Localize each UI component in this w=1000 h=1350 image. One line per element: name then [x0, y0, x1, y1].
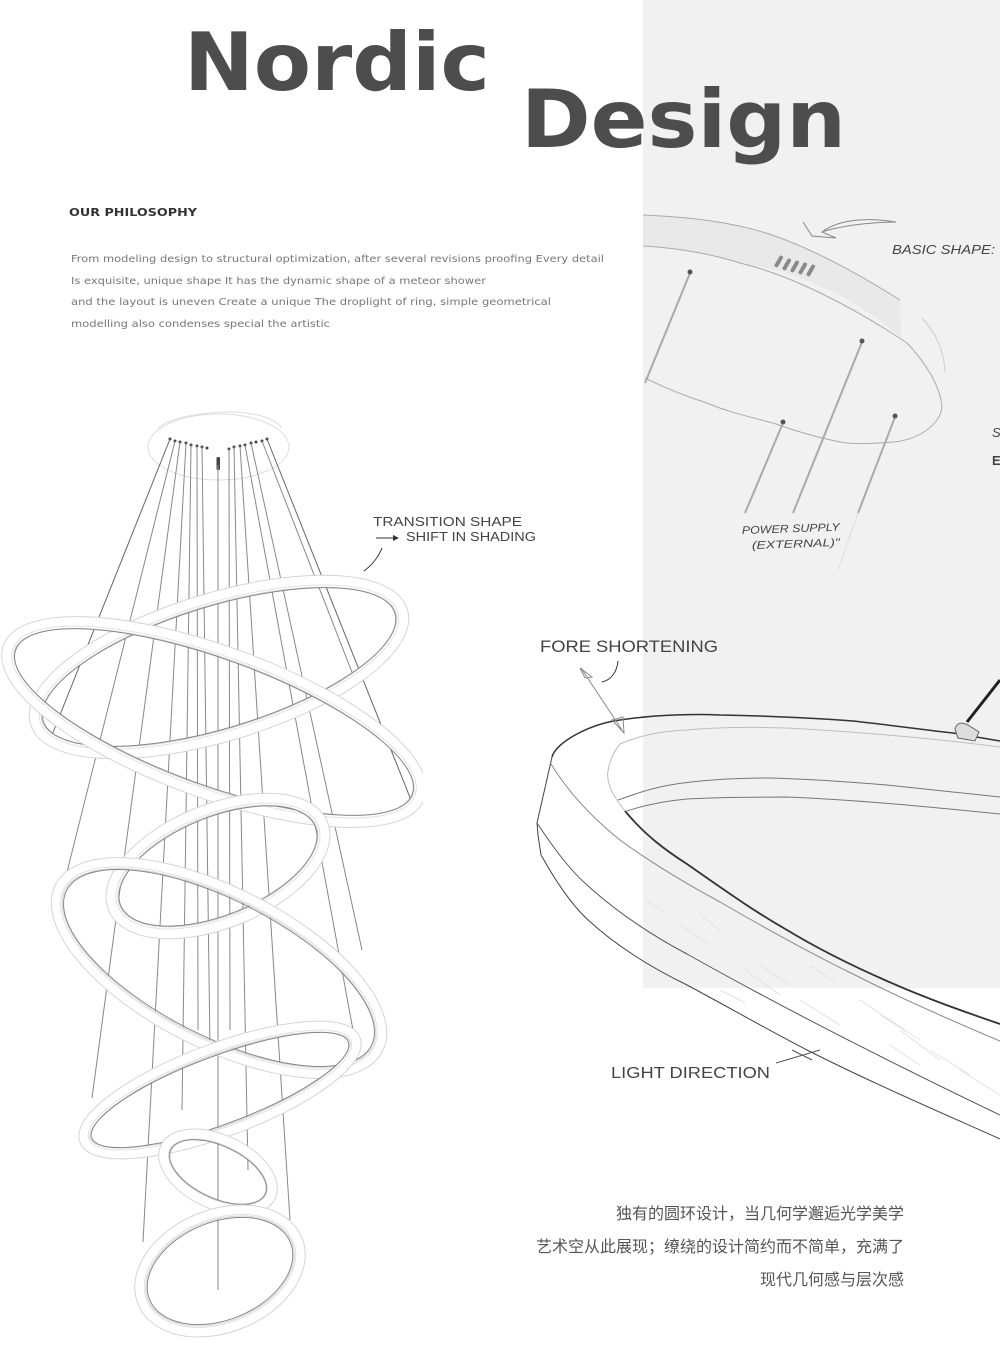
label: basic shape: BASIC SHAPE: [892, 242, 995, 257]
foreshortening arrow [580, 668, 624, 733]
text block: philosophy paragraph: and the layout is uneven Create a unique The droplight of ring, simple geometrical [71, 297, 551, 308]
ring 6 [158, 1128, 278, 1209]
ring 4 [50, 857, 388, 1079]
heading: our philosophy: OUR PHILOSOPHY [69, 206, 198, 219]
label: power supply external: POWER SUPPLY [742, 522, 841, 537]
top outer edge [552, 715, 1000, 757]
middle seam [537, 823, 1000, 1115]
label: light direction: LIGHT DIRECTION [611, 1065, 770, 1082]
text block: philosophy paragraph [71, 254, 604, 330]
illustration: large ring close-up sketch [537, 661, 1000, 1139]
ring 3 [106, 792, 330, 940]
left side edge [537, 757, 552, 855]
cable anchors [688, 270, 898, 424]
text block: chinese description: 艺术空从此展现；缭绕的设计简约而不简单，充满了 [536, 1238, 904, 1256]
text block: philosophy paragraph: modelling also condenses special the artistic [71, 319, 330, 330]
callout: transition shape: SHIFT IN SHADING [406, 529, 536, 544]
title: Design: Design [521, 73, 846, 166]
text block: philosophy paragraph: From modeling design to structural optimization, after several revisions proofing Every detail [71, 254, 604, 265]
ring 1 [28, 574, 410, 760]
label: fore shortening: FORE SHORTENING [540, 637, 718, 656]
arrow [803, 220, 896, 238]
ring 7 [134, 1204, 306, 1338]
canopy [148, 412, 289, 480]
text block: philosophy paragraph: Is exquisite, unique shape It has the dynamic shape of a meteor shower [71, 276, 486, 287]
bottom outer edge [541, 855, 1000, 1139]
callout: transition shape [364, 514, 536, 571]
hub and cable [955, 723, 979, 741]
ring 5 [78, 1020, 362, 1160]
grey lower lip [551, 764, 1000, 1041]
text block: chinese description [536, 1205, 904, 1289]
surface shading strokes [645, 900, 1000, 1095]
title: Nordic: Nordic [184, 16, 490, 109]
text block: chinese description: 现代几何感与层次感 [760, 1271, 904, 1289]
thick inner edge [625, 811, 1000, 1024]
cables [645, 273, 895, 513]
illustration: ceiling disc sketch [643, 215, 945, 570]
label: power supply external: (EXTERNAL)" [752, 537, 841, 552]
disc top band [643, 215, 901, 338]
vent slots [774, 255, 816, 277]
light inner contour [608, 727, 1000, 811]
suspension wires [50, 439, 415, 1290]
light direction pointer [776, 1050, 820, 1063]
panel: grey background block [643, 0, 1000, 988]
inner band lines [618, 778, 1000, 800]
callout: transition shape: TRANSITION SHAPE [373, 514, 522, 529]
label: power supply external [742, 522, 841, 552]
label: cropped handwriting at edge [992, 425, 1000, 468]
ring 2 [1, 616, 423, 828]
disc outline [643, 215, 942, 444]
text block: chinese description: 独有的圆环设计，当几何学邂逅光学美学 [616, 1205, 904, 1223]
chart: chandelier illustration [0, 412, 443, 1350]
